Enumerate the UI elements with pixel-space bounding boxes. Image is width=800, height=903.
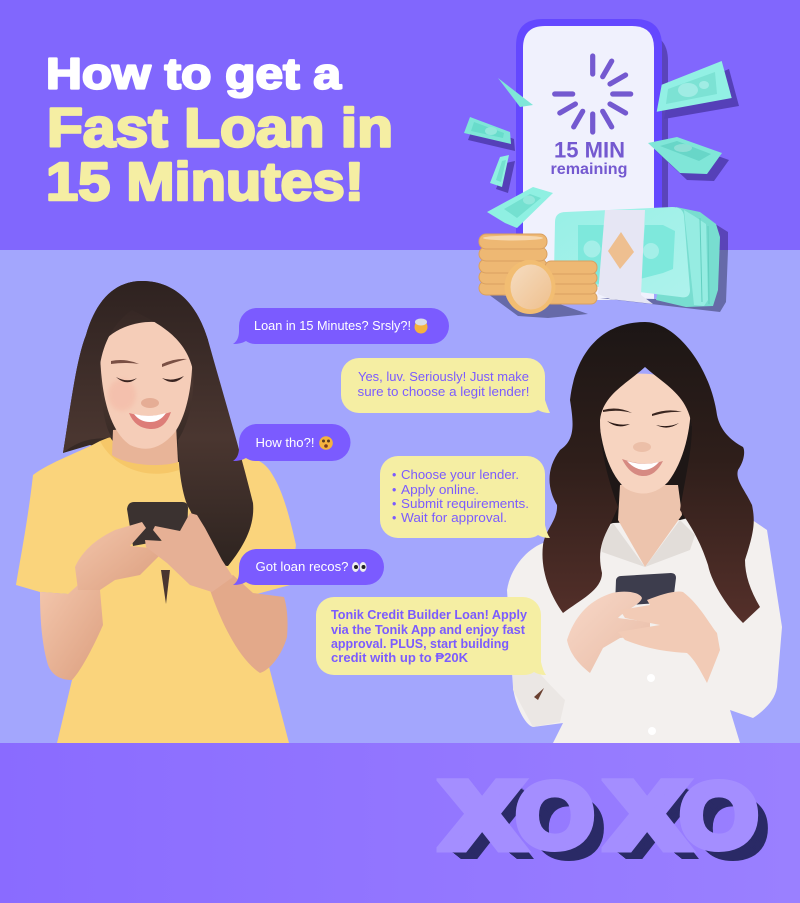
bubble: question 3 bbox=[233, 549, 384, 585]
XOXO sign-off: X bbox=[444, 764, 520, 866]
icon: mind blown emoji bbox=[414, 318, 428, 334]
shirt buttons bbox=[647, 674, 656, 735]
bubble: question 3: Got loan recos? bbox=[256, 560, 349, 574]
chat conversation bbox=[233, 308, 550, 675]
bill left bbox=[464, 117, 515, 151]
cheek shade bbox=[108, 379, 136, 411]
yellow shirt bbox=[16, 441, 296, 743]
phone bbox=[516, 19, 668, 300]
floating money bills bbox=[464, 61, 739, 228]
shirt collar bbox=[100, 437, 179, 474]
step 3: Submit requirements. bbox=[401, 497, 529, 511]
bill right bbox=[648, 137, 729, 181]
white shirt bbox=[507, 507, 782, 743]
paper band bbox=[598, 210, 653, 304]
face bbox=[598, 374, 691, 494]
step 1: Choose your lender. bbox=[401, 468, 519, 482]
hair front bbox=[63, 281, 253, 566]
left coin stack bbox=[479, 234, 547, 295]
right hand bbox=[145, 513, 233, 592]
left arm bbox=[40, 585, 103, 680]
bubble: question 2 bbox=[233, 424, 350, 461]
left hand bbox=[567, 592, 650, 673]
photo: woman in yellow shirt bbox=[16, 281, 296, 743]
nose bbox=[141, 398, 159, 408]
answer line 2: sure to choose a legit lender! bbox=[358, 385, 530, 399]
sleeve shade bbox=[513, 640, 565, 727]
title bbox=[46, 50, 393, 212]
neck bbox=[112, 425, 178, 465]
answer line 1: Yes, luv. Seriously! Just make bbox=[358, 370, 529, 384]
money circles bbox=[584, 240, 600, 258]
title line 1: How to get a bbox=[46, 50, 342, 98]
neck bbox=[618, 485, 682, 567]
XOXO sign-off bbox=[436, 764, 768, 867]
XOXO sign-off: O bbox=[680, 765, 758, 867]
bill lower left bbox=[487, 187, 553, 228]
face bbox=[100, 322, 192, 449]
right arm bbox=[210, 575, 288, 673]
timer label bbox=[550, 138, 628, 178]
bubble: question 1 bbox=[233, 308, 449, 344]
cash shadow upper bbox=[712, 222, 728, 250]
cash shadow lower bbox=[488, 250, 728, 318]
bubble: question 1: Loan in 15 Minutes? Srsly?! bbox=[254, 319, 411, 333]
hair back bbox=[590, 400, 700, 530]
cash stack bbox=[554, 207, 720, 307]
smile bbox=[622, 459, 663, 476]
phone bbox=[127, 502, 188, 546]
timer caption: remaining bbox=[550, 161, 628, 178]
title line 3: 15 Minutes! bbox=[46, 152, 364, 212]
panel: header background bbox=[0, 0, 800, 250]
bill small narrow bbox=[490, 155, 515, 193]
icon: eyes emoji bbox=[352, 562, 366, 572]
shadow under cash and coins bbox=[488, 222, 728, 318]
bill small triangle bbox=[498, 78, 533, 107]
smile bbox=[129, 412, 171, 429]
hair front bbox=[542, 322, 760, 623]
bill top right bbox=[657, 61, 739, 119]
panel: footer background bbox=[0, 743, 800, 903]
eyes bbox=[111, 359, 187, 382]
cash face bbox=[554, 207, 690, 297]
collar bbox=[600, 520, 695, 567]
phone bbox=[615, 573, 676, 606]
step 2: • bbox=[392, 483, 396, 497]
right coin stack bbox=[545, 261, 597, 304]
photo: woman in white shirt bbox=[507, 322, 782, 743]
XOXO sign-off: X bbox=[609, 764, 685, 866]
icon: shocked emoji bbox=[319, 436, 333, 450]
bubble: question 2: How tho?! bbox=[256, 436, 314, 450]
diamond mark bbox=[608, 232, 634, 269]
recommendation line 4: credit with up to ₱20K bbox=[331, 651, 468, 665]
panel: chat background bbox=[0, 250, 800, 743]
hair strand bbox=[161, 570, 170, 604]
coin stacks bbox=[479, 234, 597, 314]
nose bbox=[633, 442, 651, 452]
XOXO sign-off: O bbox=[516, 765, 594, 867]
recommendation line 2: via the Tonik App and enjoy fast bbox=[331, 623, 526, 637]
bubble: answer 1 bbox=[341, 358, 550, 413]
recommendation line 3: approval. PLUS, start building bbox=[331, 637, 509, 651]
bubble: steps bbox=[380, 456, 550, 538]
icon: loading spinner bbox=[555, 56, 631, 132]
bubble: recommendation bbox=[316, 597, 546, 675]
step 2: Apply online. bbox=[401, 483, 479, 497]
step 4: Wait for approval. bbox=[401, 511, 507, 525]
timer value: 15 MIN bbox=[554, 138, 625, 162]
right hand bbox=[618, 592, 720, 683]
front coin bbox=[504, 260, 556, 314]
left hand bbox=[75, 522, 160, 590]
step 1: • bbox=[392, 468, 396, 482]
recommendation line 1: Tonik Credit Builder Loan! Apply bbox=[331, 608, 527, 622]
illustration: phone with loan countdown and money bbox=[464, 19, 739, 318]
cuff slit bbox=[534, 688, 544, 700]
cash layers bbox=[656, 207, 720, 307]
step 4: • bbox=[392, 511, 396, 525]
title line 2: Fast Loan in bbox=[47, 96, 393, 158]
eyes bbox=[603, 409, 682, 428]
hair back bbox=[63, 281, 208, 470]
step 3: • bbox=[392, 497, 396, 511]
